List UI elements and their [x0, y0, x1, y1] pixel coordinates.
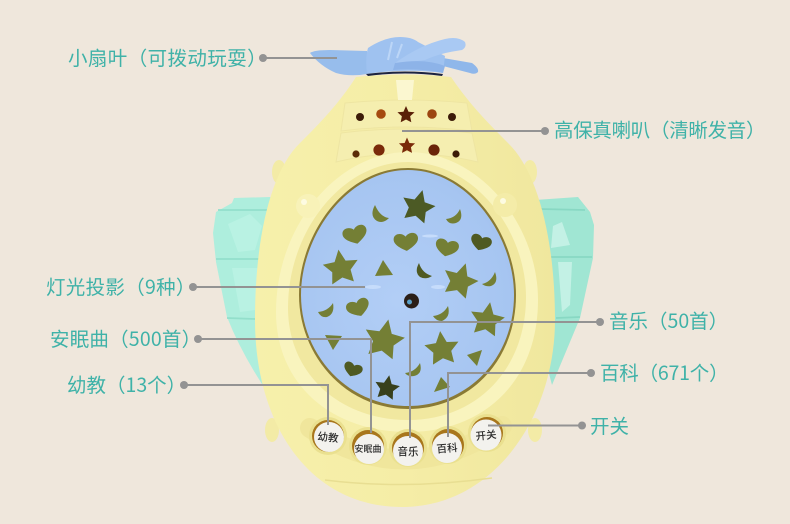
hub [366, 37, 445, 74]
callout: lullaby: 安眠曲（500首） [50, 323, 201, 352]
callout: encyclopedia: 百科（671个） [600, 357, 728, 386]
button: lullaby [349, 427, 387, 465]
star cutouts [321, 186, 507, 401]
callout: light projection [46, 271, 365, 300]
toy body [255, 74, 555, 507]
callout: power switch [488, 410, 629, 439]
triangle cutouts [325, 260, 482, 392]
fan base ring [366, 72, 443, 76]
buttons [309, 414, 506, 467]
heart cutouts [341, 224, 493, 379]
button: lullaby: 安眠曲 [354, 442, 382, 455]
callout: music: 音乐（50首） [609, 305, 728, 334]
right wing [530, 197, 594, 385]
button tray groove [310, 426, 502, 460]
callout: hi-fi speaker [402, 114, 765, 143]
callout: fan: 小扇叶（可拨动玩耍） [68, 42, 267, 71]
callout: lullaby [50, 323, 371, 433]
speaker holes [352, 106, 460, 158]
lower right blade [443, 58, 478, 74]
left blade [310, 50, 367, 75]
button: power switch [468, 414, 506, 452]
callout: music [410, 305, 728, 438]
side bumps [265, 160, 542, 442]
button: power switch: 开关 [475, 427, 498, 444]
left wing [213, 197, 282, 390]
button: music: 音乐 [398, 444, 419, 459]
callout: early education: 幼教（13个） [67, 369, 186, 398]
propeller fan [310, 37, 478, 76]
callout: early education [67, 369, 328, 425]
callout: light projection: 灯光投影（9种） [46, 271, 196, 300]
crescent cutouts [318, 205, 496, 376]
lens [404, 294, 419, 308]
button: early education: 幼教 [317, 429, 340, 446]
callout: encyclopedia [448, 357, 728, 437]
toy illustration [213, 37, 594, 507]
dome outer rim [276, 152, 538, 432]
button: encyclopedia: 百科 [436, 440, 459, 457]
button: encyclopedia [429, 426, 467, 464]
button: music [389, 429, 427, 467]
callout: hi-fi speaker: 高保真喇叭（清晰发音） [554, 114, 765, 143]
callout: power switch: 开关 [590, 410, 629, 439]
dome highlights [365, 234, 445, 289]
blue projection dome [299, 168, 516, 409]
button: early education [309, 417, 347, 455]
